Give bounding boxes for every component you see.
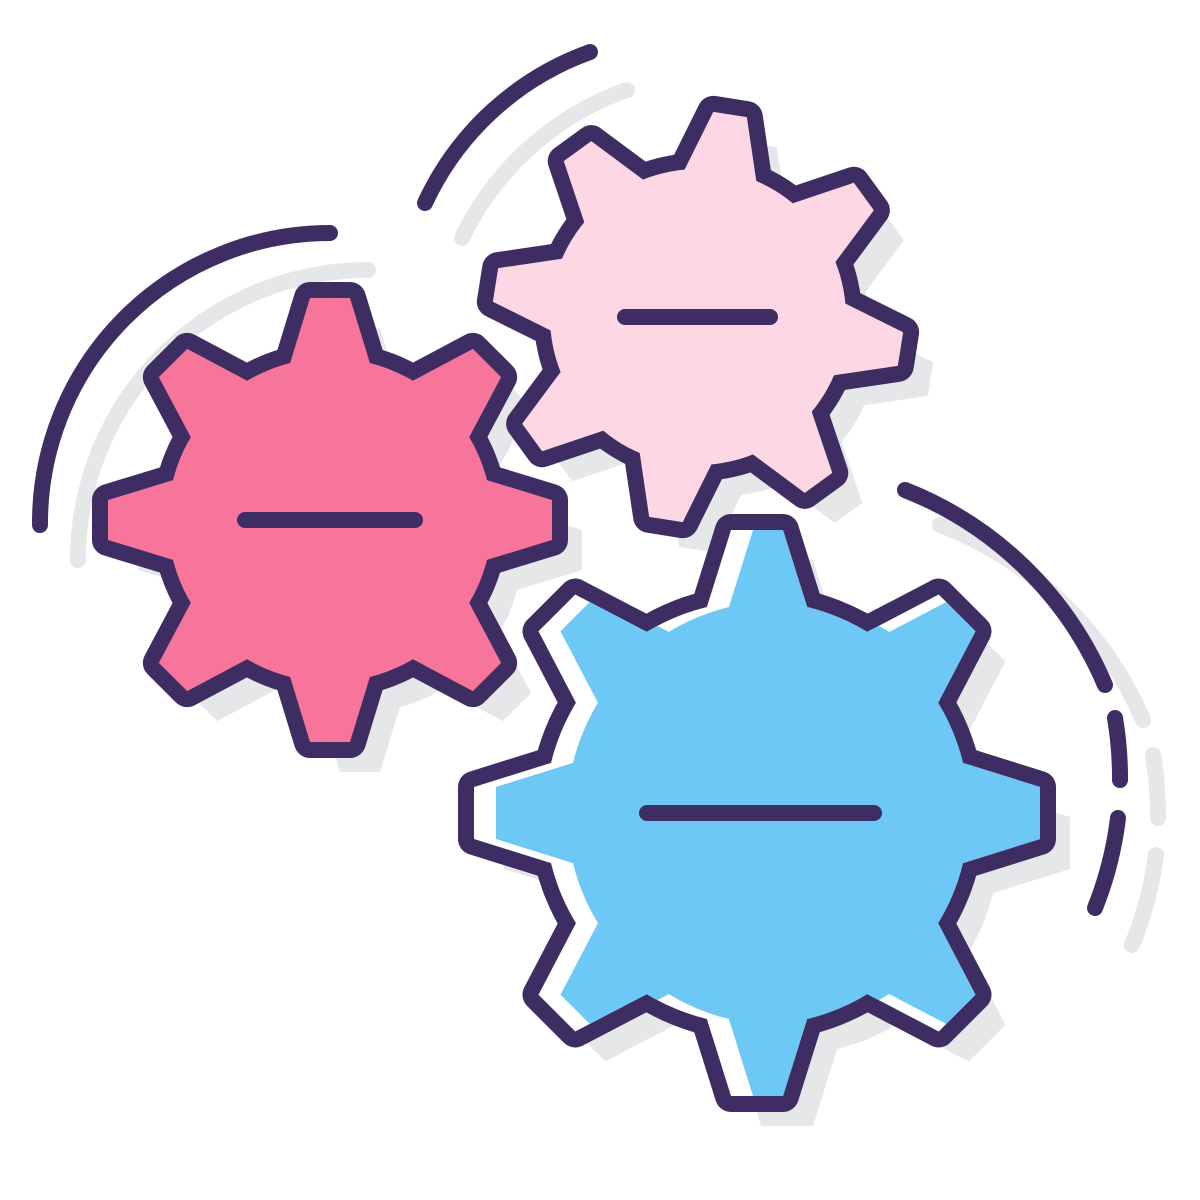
gear: pink <box>463 82 933 552</box>
minus: blue <box>647 805 874 821</box>
gear: red <box>108 298 552 742</box>
motion arcs <box>40 52 1120 908</box>
shadows <box>138 112 1070 1126</box>
minus: pink <box>625 309 770 325</box>
gear: blue <box>474 530 1062 1096</box>
minus: red <box>245 512 415 528</box>
shadow arcs <box>78 90 1158 945</box>
